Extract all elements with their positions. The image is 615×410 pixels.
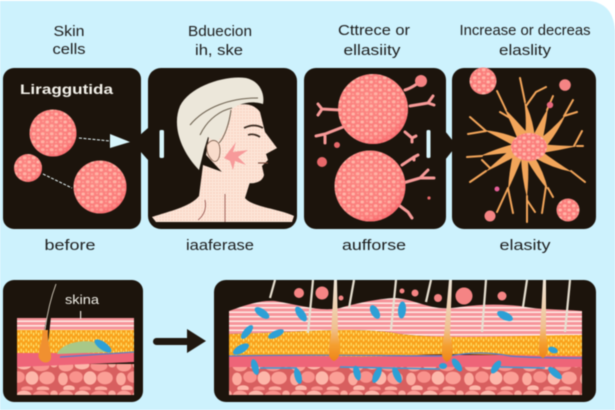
hair strands — [190, 98, 258, 143]
heading: skin cells: cells — [52, 41, 86, 58]
hair bulb — [39, 330, 51, 362]
panel: skin section before — [3, 280, 143, 402]
hair highlight — [45, 284, 56, 330]
heading: skin cells: Skin — [54, 23, 84, 40]
caption: iaaferase: iaaferase — [186, 237, 254, 254]
heading: increase or decrease elasticity — [460, 22, 590, 59]
cell: upper — [30, 110, 76, 156]
label: skina: skina — [65, 292, 100, 307]
fat layer — [17, 330, 134, 353]
cell branches — [480, 100, 578, 198]
hair follicles — [329, 280, 547, 362]
mouth — [258, 162, 268, 164]
connector: panel 1 to 2 — [140, 128, 148, 160]
lower vessel — [260, 367, 545, 369]
caption: aufforse: aufforse — [342, 237, 406, 254]
blue cell — [93, 337, 113, 355]
heading: reduction in skin: Bduecion — [188, 23, 252, 40]
blue line — [60, 352, 134, 357]
caption: elasity: elasity — [500, 237, 551, 254]
arrow: before to after — [153, 329, 206, 353]
label pointer — [80, 311, 81, 319]
arrow: dashed upper — [79, 134, 130, 148]
panel: face with skin change — [148, 68, 297, 229]
epidermis layer — [17, 318, 134, 330]
hair — [177, 78, 263, 170]
blue cells — [231, 301, 564, 385]
heading: increase or decrease elasticity: Increase or decreas — [460, 22, 590, 39]
branch forks — [467, 78, 585, 222]
heading: skin cells — [52, 23, 86, 58]
heading: change of elasticity: Cttrece or — [338, 22, 410, 39]
heading: reduction in skin — [188, 23, 252, 59]
panel: before cells — [3, 68, 141, 229]
brow and eye — [244, 126, 263, 137]
arrow: dashed lower — [43, 174, 72, 188]
vessel line — [229, 353, 582, 358]
neck lines — [198, 194, 225, 222]
small particles — [317, 142, 431, 200]
skin irritation — [224, 142, 248, 170]
cell: small — [14, 154, 42, 182]
hair follicle — [42, 284, 56, 345]
marker bar — [426, 130, 430, 158]
cobble layer — [17, 364, 134, 395]
panel: star-shaped cell — [452, 68, 596, 229]
dermis layer — [229, 355, 582, 367]
cell: lower large — [334, 150, 406, 222]
cell body — [511, 133, 547, 161]
connector: panel 3 to 4 — [445, 131, 453, 160]
cell: upper large — [338, 74, 408, 144]
cell projections lower — [400, 155, 434, 218]
cell: lower — [74, 160, 126, 214]
neck and shoulders — [152, 165, 294, 222]
heading: reduction in skin: ih, ske — [195, 42, 243, 59]
heading: change of elasticity: ellasiity — [344, 42, 401, 59]
cobble layer — [229, 364, 582, 395]
caption: before: before — [44, 237, 96, 254]
heading: increase or decrease elasticity: elaslity — [499, 42, 552, 59]
dermis layer — [17, 350, 134, 367]
label: liraglutide: Liraggutida — [20, 81, 113, 97]
ear — [207, 140, 220, 162]
vessel — [57, 341, 110, 354]
marker bar — [160, 130, 164, 158]
heading: change of elasticity — [338, 22, 410, 59]
floating cells — [470, 68, 580, 222]
fat layer — [229, 330, 582, 357]
face — [206, 104, 277, 183]
floating cells — [294, 286, 506, 304]
panel: skin section after — [214, 280, 596, 402]
panel: cells with projections — [304, 68, 446, 229]
upper bud — [415, 75, 427, 87]
cell projections upper — [316, 82, 434, 143]
hair shafts — [270, 280, 570, 333]
epidermis layer — [229, 298, 582, 337]
